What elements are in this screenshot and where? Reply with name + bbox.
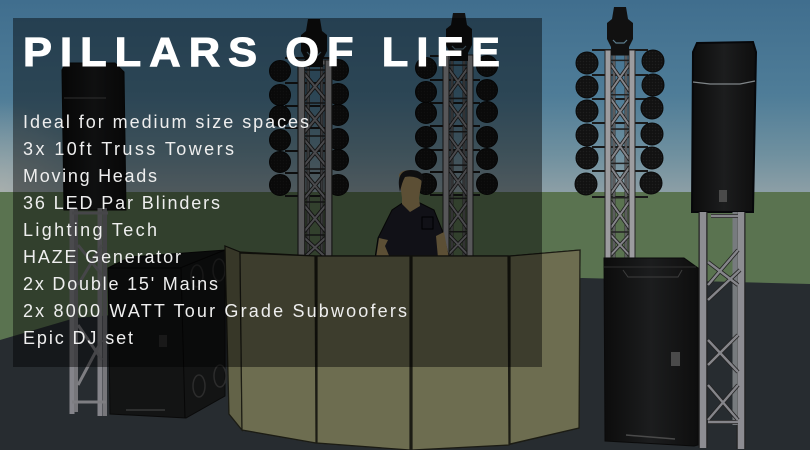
feature list: 2x 8000 WATT Tour Grade Subwoofers [23,301,407,321]
feature list: 2x Double 15' Mains [23,274,218,294]
left main speaker [62,63,126,210]
feature list [23,112,407,348]
par blinders right tower [575,50,664,197]
left subwoofer [108,250,226,418]
moving head centre [446,13,472,61]
green lawn [0,192,810,342]
DJ booth facade [225,246,580,450]
feature list: 36 LED Par Blinders [23,193,220,213]
right main speaker [692,42,756,212]
feature list: Moving Heads [23,166,157,186]
DJ figure [375,170,449,258]
truss tower right [605,50,635,258]
right speaker truss [703,212,741,449]
feature list: Epic DJ set [23,328,133,348]
sky background [0,0,810,193]
truss tower centre [443,55,473,257]
moving head right [607,7,633,55]
par blinders left tower [270,58,348,196]
dark stage floor [0,278,810,450]
right subwoofer [604,258,698,446]
truss tower left [298,60,332,260]
moving head left [301,19,327,67]
left speaker truss [72,208,108,416]
translucent text panel [13,18,542,367]
feature list: Lighting Tech [23,220,157,240]
par blinders centre tower [416,56,498,195]
title: PILLARS OF LIFE [23,29,500,75]
feature list: 3x 10ft Truss Towers [23,139,234,159]
feature list: Ideal for medium size spaces [23,112,309,132]
feature list: HAZE Generator [23,247,181,267]
